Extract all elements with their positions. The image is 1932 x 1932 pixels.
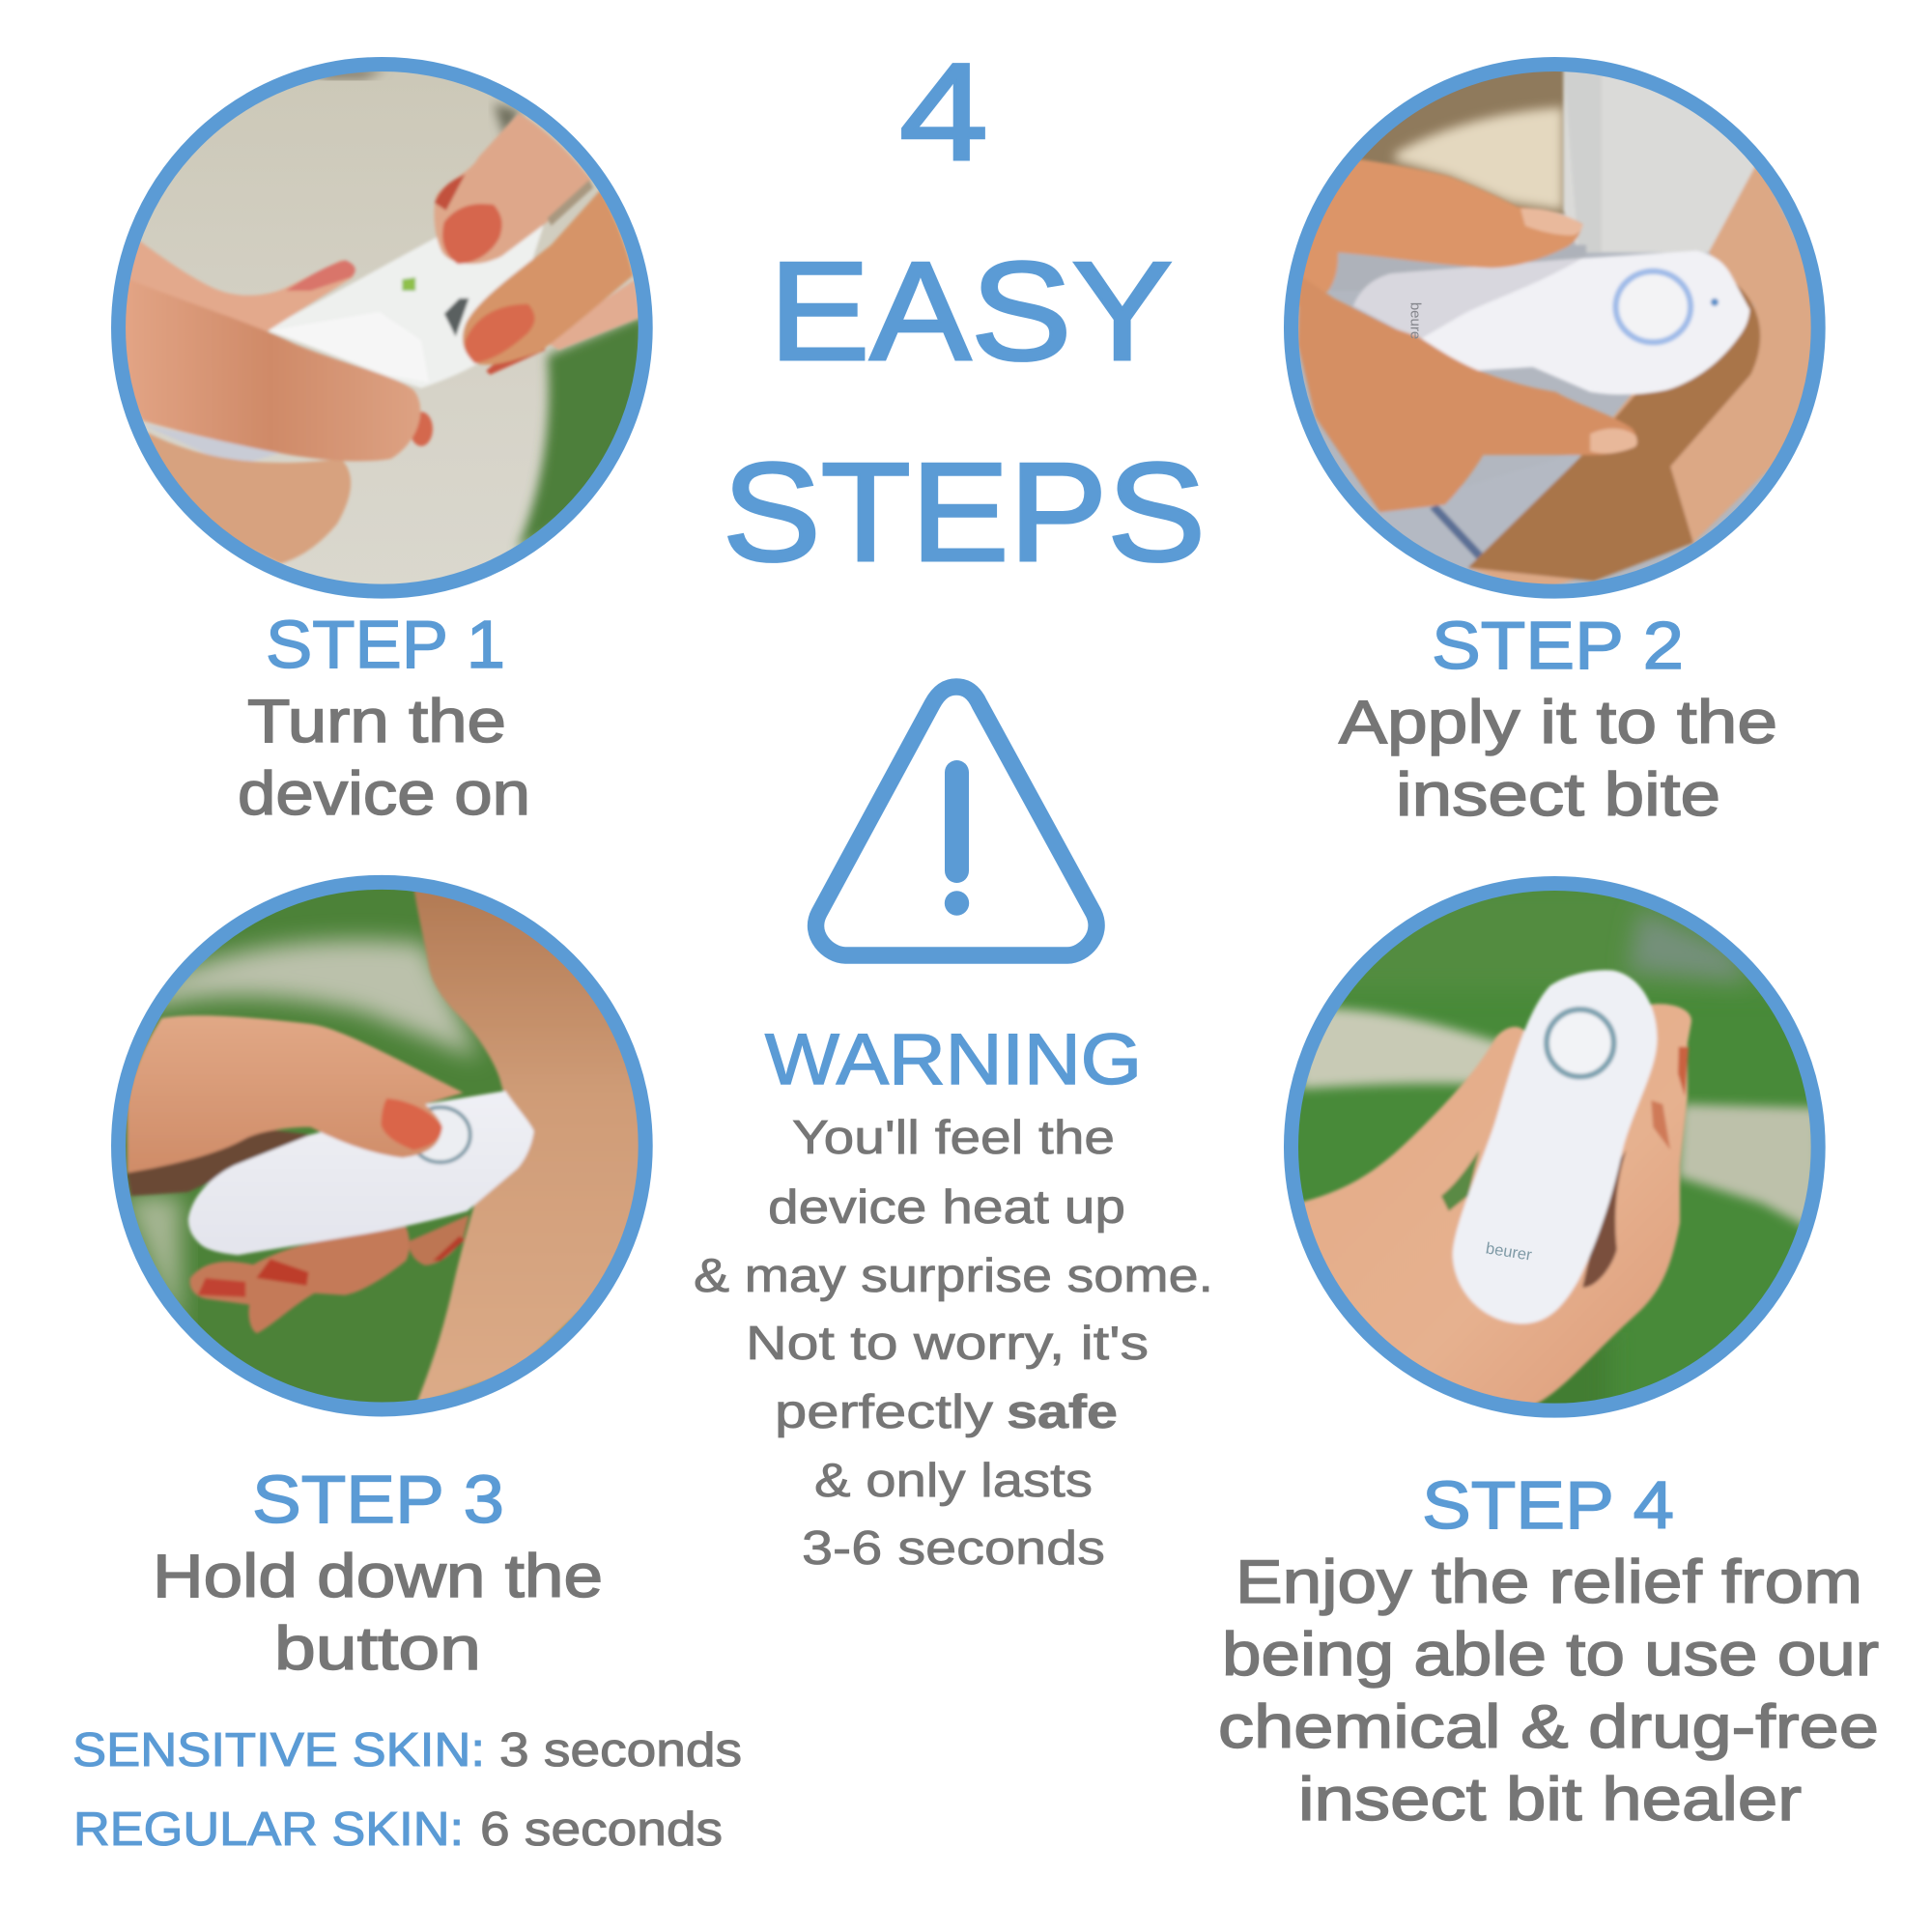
step 4 description: chemical & drug-free xyxy=(1218,1693,1879,1761)
step 4 description: being able to use our xyxy=(1222,1621,1879,1689)
photo panel: step 2, device applied to the insect bite xyxy=(1284,57,1826,599)
circle border xyxy=(1291,64,1818,591)
photo panel: step 1, fingers switching the device on xyxy=(111,57,653,599)
warning text: You'll feel the xyxy=(792,1112,1115,1164)
warning triangle icon xyxy=(816,687,1096,955)
step 3 description: button xyxy=(274,1615,481,1683)
device brand mark: beure xyxy=(1406,302,1423,339)
device brand mark: beurer xyxy=(1485,1238,1534,1264)
warning text: perfectly xyxy=(775,1386,994,1438)
title: STEPS xyxy=(723,434,1206,590)
photo panel: step 4, device resting in an open hand xyxy=(1284,876,1826,1418)
regular skin timing: REGULAR SKIN: xyxy=(73,1804,464,1856)
warning text: safe xyxy=(1007,1386,1118,1438)
step 3 description: Hold down the xyxy=(153,1543,603,1610)
step 4 description: insect bit healer xyxy=(1298,1766,1802,1833)
title: EASY xyxy=(769,233,1173,389)
sensitive skin timing: 3 seconds xyxy=(499,1724,742,1776)
step 3 heading: STEP 3 xyxy=(252,1462,504,1537)
title: 4 xyxy=(899,36,988,189)
step 2 heading: STEP 2 xyxy=(1432,608,1684,683)
photo panel: step 3, thumb holding down the button xyxy=(111,875,653,1416)
regular skin timing xyxy=(73,1804,723,1856)
step 4 heading: STEP 4 xyxy=(1422,1467,1674,1543)
warning text: Not to worry, it's xyxy=(746,1318,1149,1370)
step 3 description xyxy=(153,1543,603,1683)
step 1 description: Turn the xyxy=(247,688,506,755)
step 4 description xyxy=(1218,1548,1879,1833)
circle border xyxy=(119,64,645,591)
warning text: device heat up xyxy=(768,1181,1125,1234)
circle border xyxy=(1291,884,1818,1410)
circle border xyxy=(119,882,645,1409)
step 2 description: Apply it to the xyxy=(1339,689,1777,756)
warning text: & only lasts xyxy=(814,1455,1093,1507)
step 1 description: device on xyxy=(238,760,530,828)
sensitive skin timing xyxy=(72,1724,742,1776)
regular skin timing: 6 seconds xyxy=(480,1804,723,1856)
step 1 heading: STEP 1 xyxy=(266,607,505,682)
warning text: & may surprise some. xyxy=(694,1250,1213,1302)
step 1 description xyxy=(238,688,530,828)
warning text xyxy=(694,1112,1213,1575)
step 2 description xyxy=(1339,689,1777,829)
warning heading: WARNING xyxy=(765,1019,1142,1099)
sensitive skin timing: SENSITIVE SKIN: xyxy=(72,1724,485,1776)
step 2 description: insect bite xyxy=(1396,761,1720,829)
warning text: 3-6 seconds xyxy=(802,1522,1105,1575)
title xyxy=(723,36,1206,590)
step 4 description: Enjoy the relief from xyxy=(1236,1548,1862,1616)
